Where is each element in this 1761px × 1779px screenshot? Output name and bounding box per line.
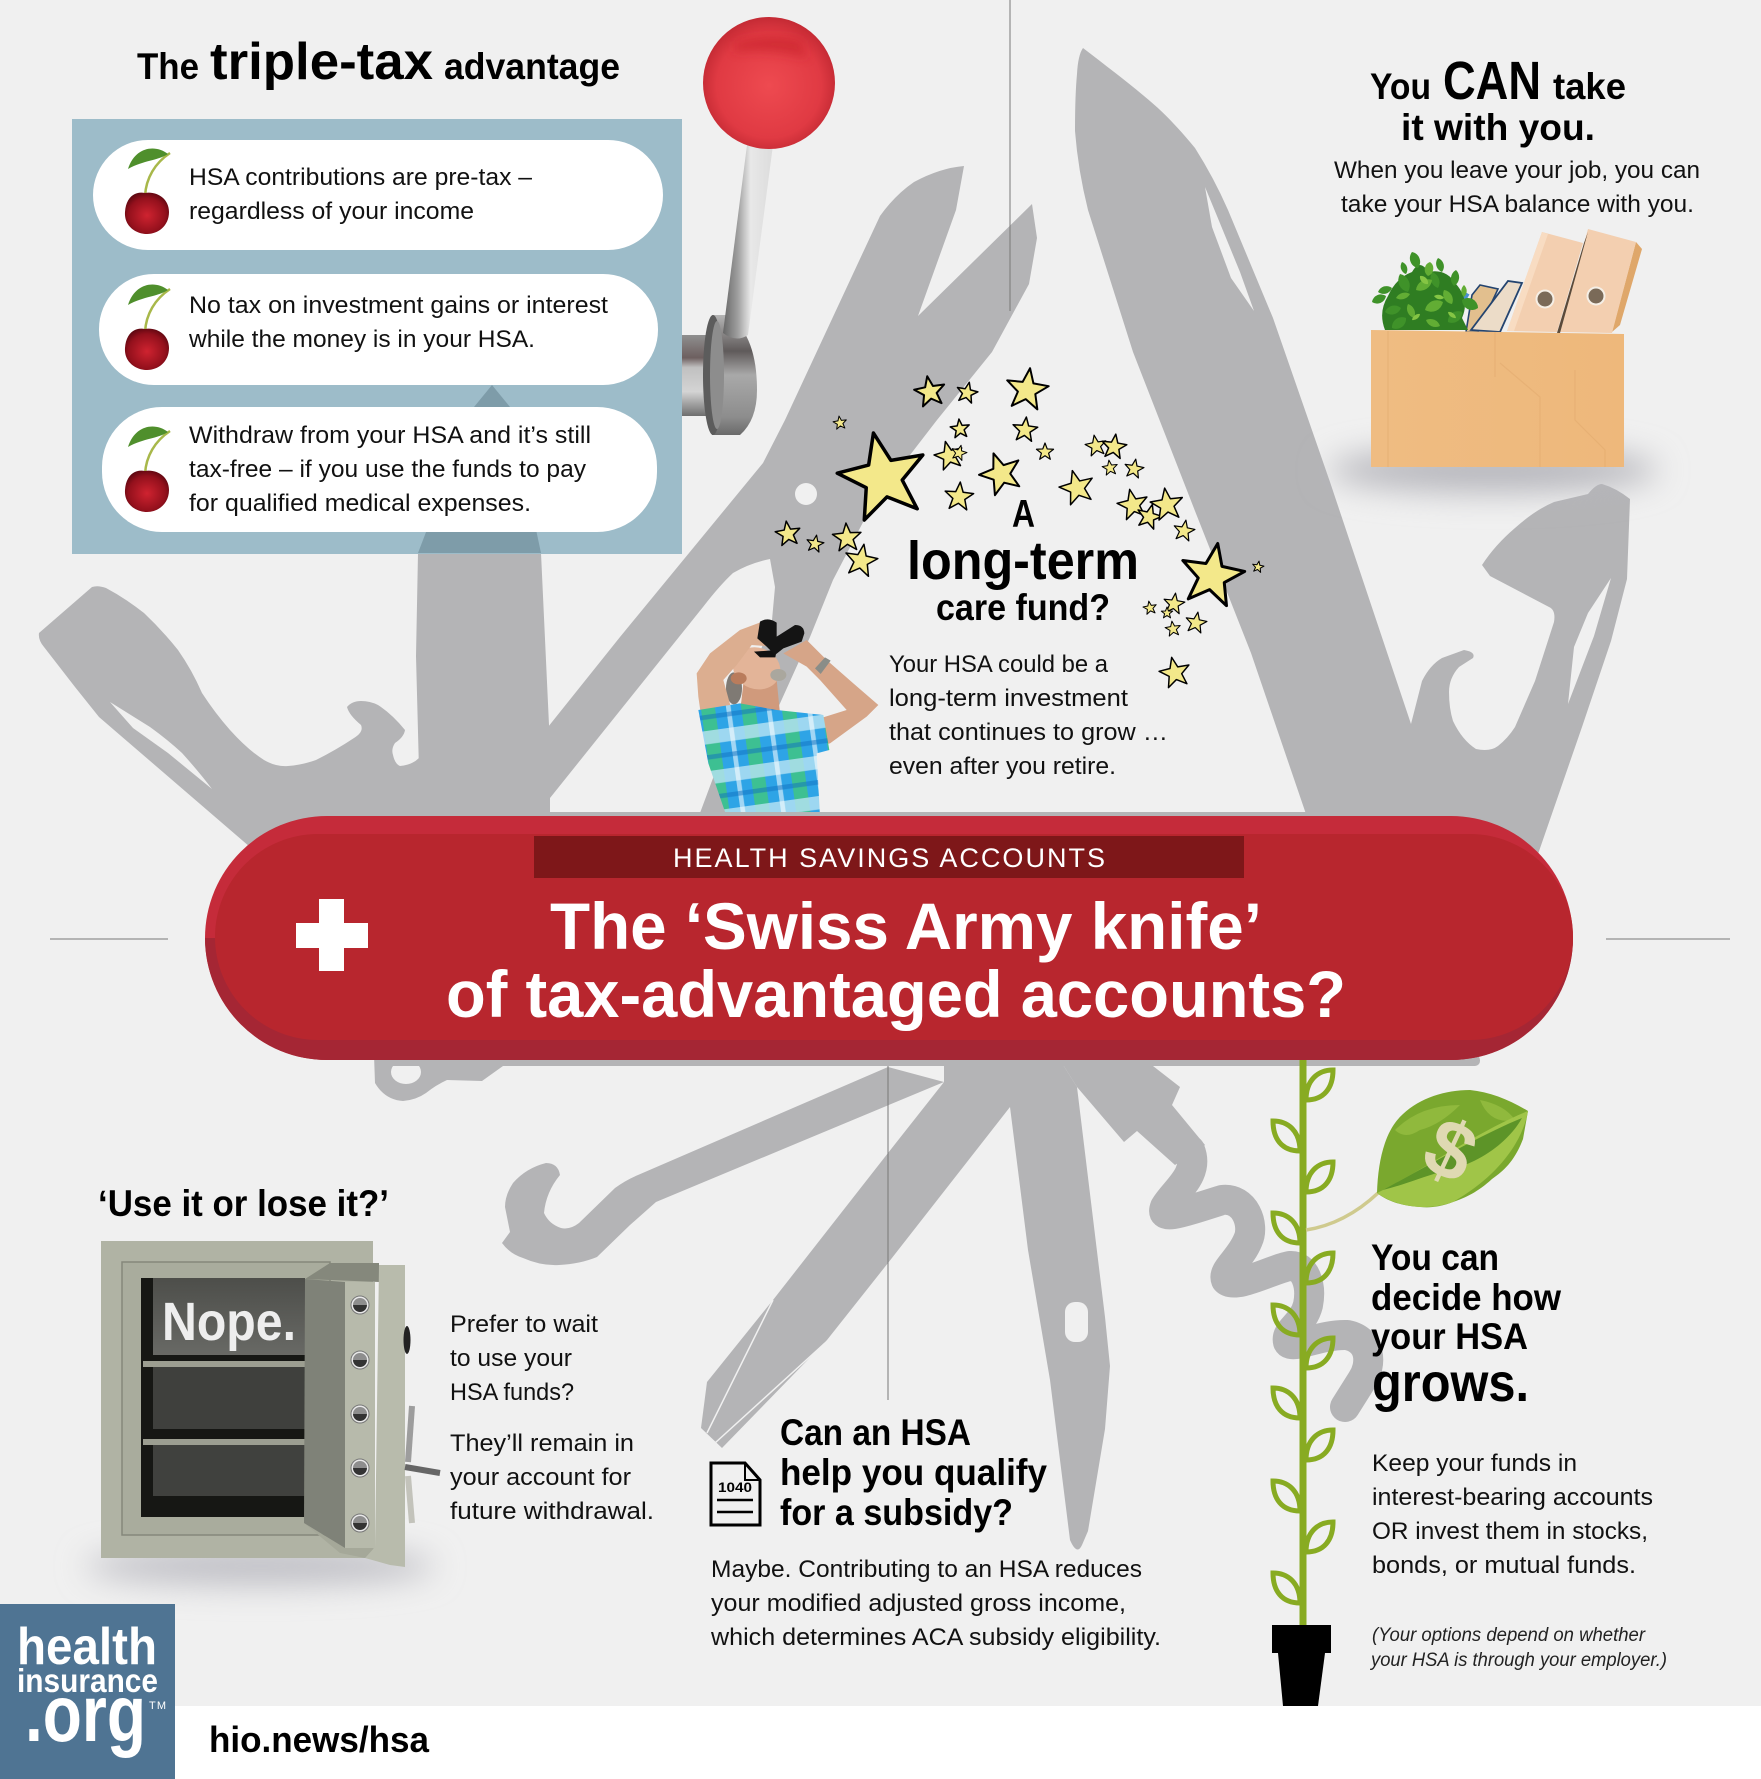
body text: your account for <box>450 1464 631 1491</box>
plant <box>1372 252 1478 330</box>
heading: You can <box>1371 1237 1499 1278</box>
item: tax-free gains: No tax on investment gains or interest <box>189 292 608 319</box>
text: long-term investment <box>889 651 1168 780</box>
body text: which determines ACA subsidy eligibility. <box>710 1624 1161 1651</box>
body text: bonds, or mutual funds. <box>1372 1552 1636 1579</box>
heading: long-term care fund: A <box>1012 493 1035 536</box>
panel: Use it or lose it <box>98 1183 654 1525</box>
image: open safe with Nope. <box>85 1241 440 1584</box>
item: tax-free gains: while the money is in your HSA. <box>188 326 535 353</box>
body text: interest-bearing accounts <box>1372 1484 1653 1511</box>
body text: your modified adjusted gross income, <box>711 1590 1126 1617</box>
open door <box>305 1263 379 1282</box>
kicker text: HEALTH SAVINGS ACCOUNTS <box>673 843 1105 873</box>
body text <box>1334 157 1700 218</box>
hook tool <box>502 1067 944 1265</box>
footer url: hio.news/hsa <box>209 1719 430 1760</box>
item: tax-free withdrawals: Withdraw from your HSA and it’s still <box>189 422 591 449</box>
icon: red-ball lever <box>682 17 835 435</box>
narrow blade (centre left) <box>416 385 550 830</box>
panel: Can an HSA help you qualify <box>710 1412 1161 1651</box>
icon: leaf with dollar sign <box>1306 1090 1528 1230</box>
note: (Your options depend on whether <box>1372 1624 1646 1646</box>
text: long-term investment: long-term investment <box>889 685 1128 712</box>
image: man with binoculars <box>697 619 878 817</box>
item: tax-free withdrawals: tax-free – if you use the funds to pay <box>189 456 587 483</box>
heading: for a subsidy? <box>780 1492 1013 1533</box>
note <box>1369 1624 1667 1671</box>
body text <box>450 1311 654 1525</box>
body text: Prefer to wait <box>450 1311 598 1338</box>
knife handle with title <box>205 812 1573 1066</box>
heading: Can an HSA <box>780 1412 971 1453</box>
logo: healthinsurance.org: .org <box>25 1669 146 1758</box>
blade seen through panel <box>418 385 541 553</box>
heading: You <box>1370 66 1431 107</box>
corkscrew <box>1060 1060 1368 1407</box>
body text: take your HSA balance with you. <box>1341 191 1694 218</box>
heading: long-term care fund <box>907 493 1139 628</box>
heading: take <box>1553 66 1626 107</box>
heading: long-term care fund: long-term <box>907 531 1139 591</box>
handle body <box>205 816 1573 1060</box>
handle shadow strips <box>375 812 1480 1066</box>
body text: to use your <box>450 1345 572 1372</box>
bolts <box>351 1296 369 1532</box>
title <box>446 889 1346 1031</box>
heading <box>1370 51 1626 148</box>
icon: 1040 form: 1040 <box>718 1479 752 1495</box>
item: pre-tax contributions: regardless of your income <box>189 198 474 225</box>
panel: You can decide how your HSA grows <box>1369 1237 1667 1671</box>
scissor blade <box>1000 1060 1110 1549</box>
can opener tines and arm (upper centre) <box>540 166 1037 817</box>
item: pre-tax contributions: HSA contributions are pre-tax – <box>189 164 532 191</box>
heading: triple-tax advantage <box>137 33 620 91</box>
heading <box>780 1412 1047 1533</box>
heading: long-term care fund: care fund? <box>936 587 1110 628</box>
image: cardboard box with plant and binders <box>1328 229 1658 492</box>
heading: triple-tax advantage: The <box>137 46 199 87</box>
item: tax-free gains <box>99 274 658 385</box>
icon: 1040 form <box>711 1463 760 1525</box>
heading: it with you. <box>1401 107 1595 148</box>
leader lines <box>50 0 1730 1400</box>
note: your HSA is through your employer.) <box>1369 1649 1667 1671</box>
item: pre-tax contributions <box>93 140 663 250</box>
screwdriver <box>701 1060 1030 1448</box>
icon: leaf with dollar sign: $ <box>1410 1100 1490 1201</box>
title: of tax-advantaged accounts? <box>446 957 1346 1031</box>
kicker bar <box>534 836 1244 878</box>
heading: your HSA <box>1371 1316 1528 1357</box>
screwdriver highlight lines <box>707 1300 825 1443</box>
body text: They’ll remain in <box>450 1430 634 1457</box>
body text: Maybe. Contributing to an HSA reduces <box>711 1556 1142 1583</box>
heading: CAN <box>1443 51 1541 111</box>
body text: future withdrawal. <box>450 1498 654 1525</box>
item: tax-free withdrawals <box>102 407 657 532</box>
text: long-term investment: even after you retire. <box>889 753 1116 780</box>
left tool with window <box>39 586 425 860</box>
panel: triple-tax advantage <box>72 119 682 554</box>
logo: healthinsurance.org: insurance <box>17 1662 158 1699</box>
icon: vine in pot <box>1272 1060 1333 1706</box>
logo: healthinsurance.org <box>0 1604 175 1779</box>
heading: triple-tax advantage: triple-tax <box>210 33 433 91</box>
footer bar <box>0 1706 1761 1779</box>
heading: decide how <box>1371 1277 1561 1318</box>
knife silhouette: tools behind the red handle <box>39 48 1630 1549</box>
logo: healthinsurance.org: health <box>17 1618 157 1676</box>
safe caption: Nope. <box>162 1292 296 1352</box>
heading: triple-tax advantage: advantage <box>444 46 620 87</box>
heading: help you qualify <box>780 1452 1047 1493</box>
heading: grows. <box>1372 1353 1529 1413</box>
panel: You CAN take it with you <box>1334 51 1700 218</box>
text: long-term investment: Your HSA could be a <box>889 651 1108 678</box>
heading: ‘Use it or lose it?’ <box>98 1183 389 1224</box>
small ring tool under handle <box>374 1055 503 1101</box>
heading <box>1371 1237 1561 1413</box>
handle <box>405 1406 440 1523</box>
big blade and bottle opener (upper right) <box>1075 48 1630 857</box>
body text: HSA funds? <box>450 1379 574 1406</box>
title: The ‘Swiss Army knife’ <box>550 889 1262 963</box>
icon: Swiss cross <box>296 899 368 971</box>
body text: Keep your funds in <box>1372 1450 1577 1477</box>
body text <box>710 1556 1161 1651</box>
logo: healthinsurance.org: TM <box>149 1700 166 1712</box>
body text: When you leave your job, you can <box>1334 157 1700 184</box>
text: long-term investment: that continues to grow … <box>889 719 1168 746</box>
body text: OR invest them in stocks, <box>1372 1518 1648 1545</box>
icon: stars <box>774 365 1265 689</box>
scissor blade slot <box>1065 1302 1088 1342</box>
body text <box>1372 1450 1653 1579</box>
item: tax-free withdrawals: for qualified medical expenses. <box>189 490 531 517</box>
